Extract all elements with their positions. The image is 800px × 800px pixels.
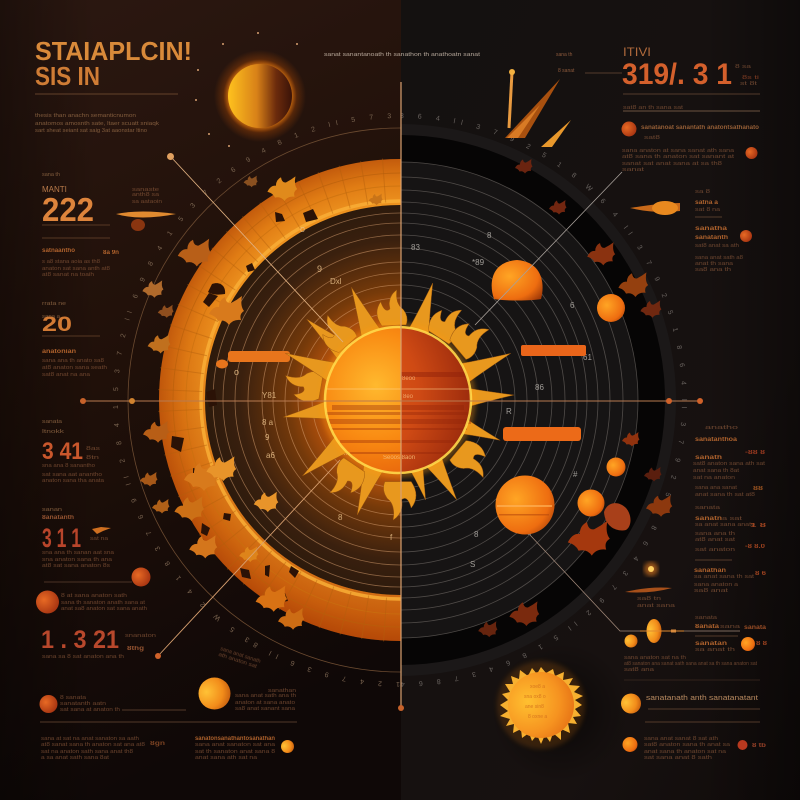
- right text block 1: sana anat sath a8: [695, 255, 743, 261]
- stat block top right: 319/. 3 1: [622, 58, 732, 91]
- right text block 2: sana anaton a: [694, 582, 739, 588]
- bottom mid text: sana anat sath ana th: [235, 693, 296, 699]
- central sun: Seoos 8aon: [383, 455, 415, 461]
- right lower text block: [695, 615, 768, 653]
- streak right: [625, 588, 676, 609]
- right tick ring: 8 6 4 ll 3 7 9 2 5 1 8 W 6 4 ll 3 7 9 2 5 1 8 6 4 ll 3 7 9 2 5 1 8 6 4 3 7 9 2 ll 5 1 8 6 4 3 7 8 6 4 ll 3 7 9 2 5 1 8 W 6 4 ll 3 7 9: [402, 113, 688, 687]
- stat block 3 41: 8as: [86, 446, 100, 452]
- planet: left large: [36, 590, 59, 614]
- small spiked sun bottom: ane sin8: [525, 704, 544, 710]
- intro text: thesis than anachn semanticnumon: [35, 113, 136, 119]
- right text block 1: sanatha: [695, 226, 728, 232]
- right scattered data glyphs: 8: [487, 231, 492, 240]
- planet: small right middle: [578, 490, 604, 516]
- title: STAIAPLCIN!: [35, 36, 192, 66]
- horizontal axis line: [80, 398, 703, 404]
- stat block top right: 8 sa: [735, 64, 752, 70]
- left scattered data glyphs: o: [300, 224, 305, 234]
- small spiked sun bottom: [490, 642, 630, 782]
- vertical axis line: [398, 82, 404, 711]
- stat block 20: [42, 301, 107, 378]
- eclipse sun top: [195, 32, 306, 147]
- orange segmented ring: [158, 158, 400, 642]
- right text block 2: anat sana th 8at: [693, 468, 740, 474]
- right lower text block: sanata: [695, 615, 718, 621]
- flare burst right: [644, 562, 658, 576]
- stat block 3 21: sat na: [90, 536, 109, 542]
- footer text left: 8gn: [150, 741, 165, 747]
- intro text: [35, 113, 159, 134]
- stat block 222: MANTI: [42, 185, 67, 194]
- stat block 3 41: sanata: [42, 419, 63, 425]
- right text block 2: sa anat sana th sat: [694, 574, 755, 580]
- bottom rule left: [40, 721, 297, 723]
- leader rule left: [44, 581, 132, 583]
- intro text: sart sheat seiant sat saig 3at aaonstar ltino: [35, 128, 147, 134]
- right scattered data glyphs: 8: [474, 530, 479, 539]
- left scattered data glyphs: oxo: [340, 450, 351, 457]
- planet: irregular right: [604, 503, 630, 530]
- right text block 2: sat8 anaton sana ath sat: [693, 461, 766, 467]
- icon: flat saturn right: [630, 201, 680, 215]
- bottom right text: 8 tb: [752, 743, 766, 749]
- stat block 3 21: sna anaton sana th ana: [42, 557, 113, 563]
- right lower text block: sana: [720, 624, 742, 630]
- right orange bar lower: [503, 427, 581, 441]
- right orange bar upper: [521, 345, 586, 356]
- footer text left: sana at sat na anat sanaton sa aath: [41, 736, 139, 742]
- right text block 1: satna a: [695, 200, 719, 206]
- text block right upper: sana anaton at sana sanat ath sana: [622, 148, 735, 154]
- streak right: sa8 tn: [637, 596, 661, 602]
- stat block 1 3 21: [41, 626, 156, 660]
- planet: large lower right: [496, 476, 554, 534]
- text block right upper: sanat: [622, 167, 645, 173]
- text beside top right planet: [641, 125, 759, 141]
- planet: left mid red: [132, 568, 150, 586]
- right scattered data glyphs: #: [573, 470, 578, 479]
- text beside top right planet: sanatanoat sanantath anatontsathanato: [641, 125, 759, 131]
- right text block 2: 1 8: [750, 523, 767, 529]
- right scattered data glyphs: 61: [583, 353, 592, 362]
- right scattered data glyphs: [411, 231, 592, 569]
- right text block 2: sana ana sanat: [695, 485, 738, 491]
- footer text left: sanatonsanathantosanathan: [195, 736, 275, 742]
- comet rays top right: [505, 52, 622, 147]
- stat block 3 41: 3 41: [42, 438, 83, 465]
- right orbit rings: [402, 162, 638, 638]
- right text block 1: sat8 anat sa ath: [695, 243, 739, 249]
- dark red flares: [478, 159, 672, 637]
- text beside small planet: 8 sanata: [60, 695, 87, 701]
- right text block 2: sanatanthoa: [695, 437, 738, 443]
- rule top right: [623, 93, 760, 95]
- small spiked sun bottom: xoe8 a: [530, 684, 545, 690]
- right half of central orbit diagram: [402, 113, 688, 687]
- right text block 2: anat sana th sat at8: [695, 492, 755, 498]
- stat block 3 41: [42, 419, 105, 484]
- right scattered data glyphs: 8: [527, 528, 532, 537]
- icon: small flare left: [92, 527, 111, 534]
- title rule: [35, 93, 178, 95]
- orange flares around ring: [140, 176, 383, 630]
- text beside top right planet: sat8: [644, 135, 660, 141]
- footer text left: a sa anat sath sana 8at: [41, 755, 110, 761]
- footer text left: [41, 736, 276, 761]
- left scattered data glyphs: a6: [266, 451, 275, 460]
- stat block 20: rrata ne: [42, 301, 66, 307]
- right text block 2: anatho: [705, 425, 738, 431]
- footer text left: at8 sanat sana th anaton sat ana at8: [41, 742, 145, 748]
- comet rays top right: 8 sanat: [558, 68, 575, 74]
- left half of central orbit diagram: [113, 113, 400, 687]
- stat block 3 21: [42, 507, 115, 569]
- text above rule bottom right: at8 sanaton ana sanat sath sana anat sa th sana anaton sat: [624, 661, 757, 667]
- text beside small planet: sat sana at anaton th: [60, 707, 120, 713]
- right text block 2: sanata: [695, 505, 721, 511]
- right scattered data glyphs: *89: [472, 258, 485, 267]
- stat block 3 41: anaton sana tha anata: [42, 478, 105, 484]
- stat block 222: [42, 172, 162, 278]
- right lower text block: 8anata: [695, 624, 720, 630]
- bottom center caption: sana anat sanath: [219, 646, 261, 665]
- stat block 222: sa aataoin: [132, 199, 162, 205]
- title: [35, 36, 192, 91]
- red dot bottom right: [738, 740, 748, 750]
- planet: small left lower: [40, 695, 58, 713]
- central sun: 8eo: [403, 394, 414, 400]
- right text block 2: sanath: [695, 455, 722, 461]
- stat block 3 41: sat sana aat anantho: [42, 472, 102, 478]
- small spiked sun bottom: 8 oxne a: [528, 714, 547, 720]
- sun rays: [281, 280, 515, 520]
- right text block 2: sana ana th: [695, 531, 735, 537]
- right text block 2: 88: [753, 486, 764, 492]
- stat block 222: sana th: [42, 172, 60, 178]
- right scattered data glyphs: 8 d: [520, 435, 530, 442]
- planet: tiny right: [606, 458, 626, 476]
- planet: right red small: [740, 230, 752, 242]
- title: SIS IN: [35, 61, 100, 91]
- right text block 2: sa anat sana anato: [695, 522, 755, 528]
- left scattered data glyphs: Y81: [262, 391, 277, 400]
- planet: footer dot left: [281, 740, 294, 753]
- planet: bottom right small: [622, 737, 638, 752]
- right text block 2: a sat: [722, 516, 743, 522]
- sub rule top right: sat8 an th sana sat: [623, 105, 684, 111]
- sub rule top right: [623, 105, 760, 111]
- text above rule bottom right: [624, 655, 760, 680]
- central sun: 8eoo: [402, 376, 416, 382]
- text beside small planet: [60, 695, 186, 713]
- right text block 1: sa8 ana th: [695, 267, 731, 273]
- right text block 1: sanatanth: [695, 235, 728, 241]
- stat block 3 41: ltnokk: [42, 429, 64, 435]
- stat block 3 21: sna ana th sanan aat sna: [42, 550, 115, 556]
- bottom right heading: sanatanath anth sanatanatant: [646, 693, 759, 702]
- planet: lower right orange: [741, 637, 755, 651]
- stat block 222: at8 sanat na toaih: [42, 272, 94, 278]
- stat block top right: ITIVI: [623, 45, 651, 59]
- left scattered data glyphs: 8: [338, 513, 343, 522]
- text above rule bottom right: sat8 ana: [624, 667, 655, 673]
- text beside left planet: [61, 593, 147, 612]
- stat block 222: 8a 9n: [103, 250, 119, 256]
- streak right: anat sana: [637, 603, 676, 609]
- right text block 2: sat anaton: [695, 547, 735, 553]
- text beside left planet: sana th sanaton anath sana at: [61, 600, 146, 606]
- bottom right text: sana anat sanat 8 sat ath: [644, 736, 718, 742]
- planet: small right top: [597, 294, 625, 322]
- left orbit rings: [212, 212, 400, 588]
- stat block 20: sana ana th anato sa8: [42, 358, 104, 364]
- header centre text: sanat sanantanoath th sanathon th anathoatn sanat: [324, 52, 481, 58]
- left scattered data glyphs: 9: [265, 433, 270, 442]
- right text block 2: sat na anaton: [693, 475, 735, 481]
- right text block 2: [693, 425, 767, 594]
- right scattered data glyphs: 86: [535, 383, 544, 392]
- text beside left planet: 8 at sana anaton sath: [61, 593, 127, 599]
- stat block 3 41: sna ana 8 sanantho: [42, 463, 95, 469]
- stat block top right: [622, 45, 759, 91]
- left scattered data glyphs: f: [390, 533, 393, 542]
- stat block 20: sana a: [42, 314, 61, 320]
- planet: yellow bottom left: [198, 678, 230, 710]
- footer text left: anat sana ath sat na: [195, 755, 258, 761]
- footer text left: sana anat sanaton sat ana: [195, 742, 276, 748]
- stat block 222: satnaantho: [42, 248, 75, 254]
- bottom right text: sat sana anat 8 sath: [644, 755, 712, 761]
- bottom mid text: sanathan: [268, 688, 296, 694]
- diagonal leader lower right: [530, 535, 740, 631]
- small spiked sun bottom: sna ox8 o: [524, 694, 546, 700]
- right text block 1: [695, 189, 743, 273]
- right scattered data glyphs: 9: [517, 523, 522, 532]
- left scattered data glyphs: 8 a: [262, 418, 274, 427]
- left scattered data glyphs: o: [234, 367, 239, 377]
- right text block 2: sanatn: [695, 516, 722, 522]
- stat block 222: s a8 stana aoia as th8: [42, 259, 100, 265]
- right text block 2: 8 6: [755, 571, 767, 577]
- planet: lower right yellow: [624, 634, 638, 648]
- text block right upper: at8 sana th anaton sat sanant at: [622, 154, 735, 160]
- stat block 3 41: 8tn: [86, 455, 99, 461]
- stat block top right: 8s ti: [742, 75, 759, 81]
- left inner disc: [205, 205, 400, 595]
- planet: top right small: [622, 122, 636, 136]
- planet: right upper red: [746, 147, 758, 159]
- bottom right text: anat sana th anaton sat na: [644, 749, 727, 755]
- central sun: [320, 322, 476, 478]
- comet rays top right: sana th: [556, 52, 573, 58]
- stat block 222: 222: [42, 191, 94, 228]
- diagonal leader upper left: [167, 153, 343, 342]
- stat block 20: anatonian: [42, 349, 76, 355]
- left tick ring: 1 2 4 7 9 3 6 ll 83 5 W 2 4 1 8 3 7 6 9 ll 2 8 4 1 5 3 7 2 ll 6 9 8 4 1 5 3 7 2 6 9 4 8 1 2 ll 5 7 3 1 2 4 7 9 3 6 ll 83 5 W 2 4 1 8 3 7 6 9: [113, 113, 400, 687]
- right lower text block: sanata: [744, 625, 767, 631]
- right text block 1: anat th sana: [695, 261, 734, 267]
- right text block 1: sat 8 na: [695, 207, 721, 213]
- text beside small planet: sanatanth aatn: [60, 701, 106, 707]
- stat block 222: anth8 sa: [132, 192, 160, 198]
- stat block 20: sat8 anat na ana: [42, 372, 91, 378]
- right text block 2: at8 anat sat: [695, 537, 736, 543]
- bottom center caption: ath anaton sat: [218, 652, 258, 670]
- icon: flat saturn left: [116, 212, 176, 231]
- stat block 1 3 21: snanaton: [125, 633, 156, 639]
- intro text: anatomos amosnth sate, ltaer scuatt sniaqk: [35, 121, 159, 127]
- diagonal leader upper right: [475, 172, 622, 325]
- footer text left: sat th sanaton anat sana 8: [195, 749, 275, 755]
- stat block 3 21: sanan: [42, 507, 62, 513]
- right scattered data glyphs: 6: [570, 301, 575, 310]
- text above rule bottom right: sana anaton sat na th: [624, 655, 686, 661]
- stat block 3 21: 3 1 1: [42, 523, 81, 553]
- left orange bar: [216, 351, 290, 368]
- right scattered data glyphs: S: [470, 560, 475, 569]
- right text block 2: sa8 anat: [694, 588, 729, 594]
- planet: bottom right large: [621, 694, 641, 714]
- ovoid planet right lower: [640, 619, 684, 643]
- text block right upper: [622, 148, 735, 173]
- stat block 20: at8 anaton sana seath: [42, 365, 107, 371]
- text beside left planet: anat sa8 anaton sat sana anath: [61, 606, 147, 612]
- bottom mid text: [235, 688, 296, 712]
- right scattered data glyphs: R: [506, 407, 512, 416]
- stat block 1 3 21: sana sa 8 sat anaton ana th: [42, 654, 124, 660]
- right text block 1: sa 8: [695, 189, 710, 195]
- right lower text block: sanatan: [695, 641, 727, 647]
- left scattered data glyphs: Dxl: [330, 277, 342, 286]
- left scattered data glyphs: [234, 224, 393, 542]
- stat block 3 21: 8anatanth: [42, 515, 74, 521]
- stat block 1 3 21: 1 . 3 21: [41, 626, 119, 654]
- stat block 222: sanaste: [132, 187, 159, 193]
- right lower text block: 8 8: [756, 641, 768, 647]
- bottom right text: sat8 anaton sana th anat sa: [644, 742, 731, 748]
- right text block 2: sanathan: [694, 568, 726, 574]
- ring notches: [171, 209, 318, 603]
- diagonal leader lower left: [155, 460, 340, 659]
- stat block top right: st 8t: [740, 81, 758, 87]
- stat block 20: 20: [42, 313, 72, 336]
- bottom mid text: anaton at sana anato: [235, 700, 295, 706]
- stat block 1 3 21: 8thg: [127, 646, 144, 652]
- text block right upper: sanat sat anat sana at sa th8: [622, 161, 722, 167]
- bottom mid text: sa8 anat sanant sana: [235, 706, 296, 712]
- right text block 2: -8 8.0: [745, 544, 766, 550]
- left scattered data glyphs: 9: [317, 264, 322, 274]
- right scattered data glyphs: 83: [411, 243, 420, 252]
- bottom right heading: [645, 693, 760, 722]
- right lower text block: sa anat th: [695, 647, 735, 653]
- footer text left: sat na anaton sath sana anat th8: [41, 749, 133, 755]
- stat block 222: anaton sat sana anth at8: [42, 266, 110, 272]
- bottom right text: [644, 736, 766, 761]
- right text block 2: -88 8: [745, 450, 766, 456]
- planet: upper right domed: [492, 260, 543, 300]
- stat block 3 21: at8 sat sana anaton 8s: [42, 563, 110, 569]
